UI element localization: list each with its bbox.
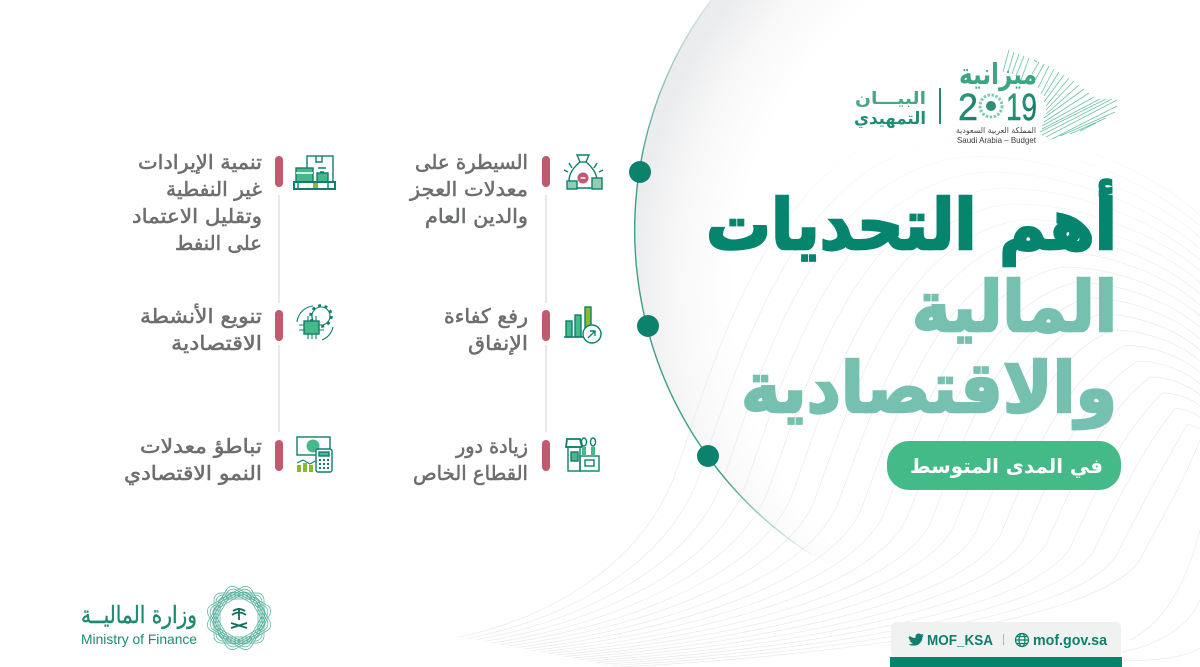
- item: private sector: [413, 434, 599, 485]
- item: private sector: القطاع الخاص: [413, 461, 528, 485]
- title line 1: أهم التحديات: [706, 179, 1117, 266]
- title line 3: والاقتصادية: [741, 347, 1117, 429]
- item: diversifying activities: [140, 304, 333, 355]
- circle edge line: [635, 0, 812, 555]
- connector column left: [278, 195, 280, 432]
- item: spending efficiency: الإنفاق: [468, 331, 528, 355]
- ministry english name: Ministry of Finance: [81, 631, 197, 647]
- icon: bar chart with arrow: [564, 307, 601, 343]
- icon: globe: [1016, 634, 1028, 646]
- item: diversifying activities: الاقتصادية: [171, 331, 262, 355]
- timeline dot 1: [629, 161, 651, 183]
- item: non-oil revenues: [132, 150, 335, 255]
- year 2019: 2: [958, 87, 978, 129]
- year 2019: 19: [1006, 87, 1037, 129]
- icon: shop and people: [566, 438, 599, 471]
- icon: banknote and calculator: [297, 437, 332, 472]
- year 2019: [958, 87, 1037, 129]
- item: deficit and debt: معدلات العجز: [409, 177, 528, 201]
- item: spending efficiency: [444, 304, 601, 355]
- contact bar: [890, 622, 1122, 667]
- contour line pattern: [460, 125, 1200, 667]
- item: non-oil revenues: تنمية الإيرادات: [138, 150, 262, 174]
- item: deficit and debt: [409, 150, 603, 228]
- ministry of finance logo: [81, 584, 273, 652]
- item: growth slowdown: [124, 434, 332, 486]
- statement title: البيـــان: [855, 89, 926, 109]
- map hatch: [1003, 50, 1117, 139]
- ministry arabic name: وزارة الماليــة: [81, 601, 197, 629]
- subtitle pill: في المدى المتوسط: [910, 454, 1103, 479]
- item: private sector: زيادة دور: [455, 434, 528, 458]
- timeline dot 2: [637, 315, 659, 337]
- item: non-oil revenues: غير النفطية: [166, 177, 262, 201]
- item: spending efficiency: رفع كفاءة: [444, 304, 528, 328]
- item: non-oil revenues: على النفط: [175, 231, 262, 255]
- budget 2019 logo: التمهيدي: [854, 109, 926, 129]
- icon: boxes on pallet: [294, 156, 335, 189]
- separator: [1003, 634, 1004, 645]
- heading: ميزانية: ميزانية: [959, 57, 1037, 91]
- main title: [706, 179, 1117, 429]
- title line 2: المالية: [912, 266, 1117, 348]
- subtitle pill: [887, 441, 1121, 490]
- logo subtitle latin: Saudi Arabia – Budget: [957, 135, 1037, 145]
- logo subtitle arabic: المملكة العربية السعودية: [956, 126, 1036, 135]
- website: mof.gov.sa: [1033, 633, 1108, 649]
- twitter handle: MOF_KSA: [927, 633, 993, 649]
- timeline dot 3: [697, 445, 719, 467]
- icon: gear and chip: [297, 306, 333, 340]
- item: diversifying activities: تنويع الأنشطة: [140, 304, 262, 328]
- icon: money bag: [564, 155, 603, 189]
- item: non-oil revenues: وتقليل الاعتماد: [132, 204, 262, 228]
- item: deficit and debt: السيطرة على: [415, 150, 528, 174]
- icon: twitter bird: [908, 634, 924, 646]
- rosette emblem: [205, 584, 273, 652]
- item: growth slowdown: تباطؤ معدلات: [140, 434, 262, 458]
- logo divider: [939, 88, 941, 124]
- item: deficit and debt: والدين العام: [425, 204, 528, 228]
- connector column right: [545, 195, 547, 432]
- budget 2019 logo: [854, 50, 1117, 145]
- item: growth slowdown: النمو الاقتصادي: [124, 461, 262, 486]
